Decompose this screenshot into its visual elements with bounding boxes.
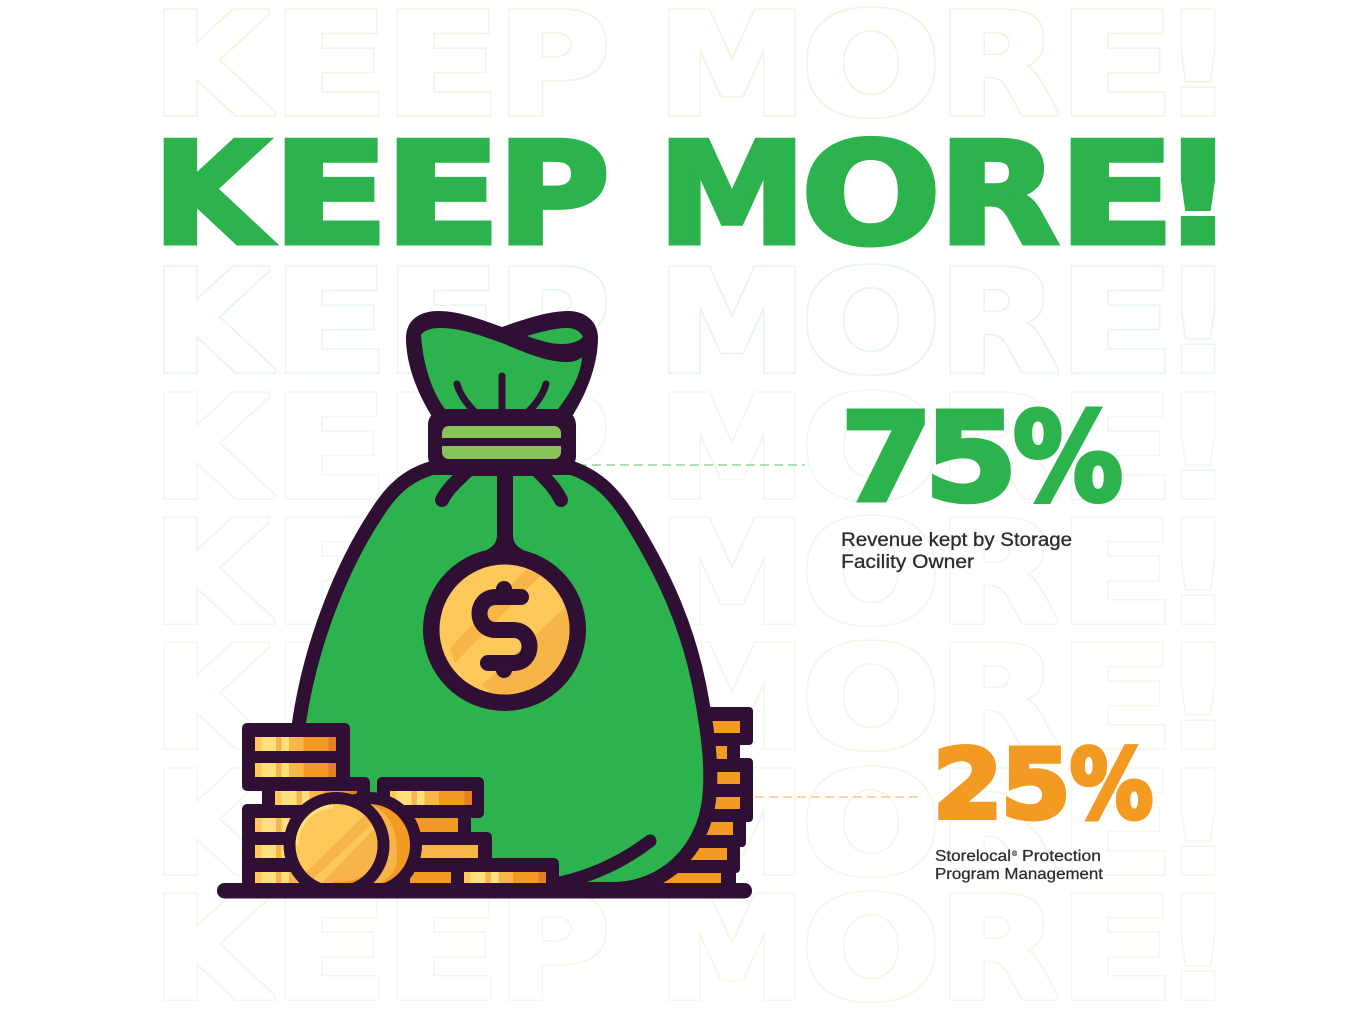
- dashed connector: 75%: [578, 464, 805, 466]
- background outlined text rows: P: [497, 241, 610, 405]
- background outlined text rows: E: [272, 743, 389, 907]
- title: M: [658, 113, 806, 277]
- 75% number: %: [1013, 387, 1123, 529]
- 25% number: 2: [933, 730, 1002, 840]
- background outlined text rows: K: [153, 492, 274, 656]
- dashed connector: 25%: [755, 796, 920, 798]
- icon: money bag with coin stacks: [217, 311, 753, 898]
- background outlined text rows: P: [497, 743, 610, 907]
- bag strings: [474, 474, 535, 555]
- title: R: [938, 113, 1059, 277]
- 25% caption: Protection: [1022, 848, 1101, 865]
- background outlined text rows: E: [384, 743, 501, 907]
- background outlined text rows: !: [1161, 617, 1235, 781]
- bag top knot: [406, 311, 598, 418]
- title: P: [497, 113, 610, 277]
- background outlined text rows: !: [1161, 743, 1235, 907]
- bag tie band: [428, 410, 576, 476]
- background outlined text rows: E: [1058, 617, 1175, 781]
- background outlined text rows: R: [938, 743, 1059, 907]
- background outlined text rows: E: [1058, 367, 1175, 531]
- background outlined text rows: M: [658, 241, 806, 405]
- background outlined text rows: E: [384, 617, 501, 781]
- 75% caption: Revenue kept by Storage: [841, 530, 1072, 551]
- background outlined text rows: E: [384, 241, 501, 405]
- background outlined text rows: M: [658, 367, 806, 531]
- background outlined text rows: O: [801, 241, 941, 405]
- bag body: [298, 468, 710, 889]
- background outlined text rows: !: [1161, 241, 1235, 405]
- 25% caption: Program Management: [935, 866, 1104, 883]
- background outlined text rows: P: [497, 367, 610, 531]
- 25% caption: Storelocal: [935, 848, 1011, 865]
- background outlined text rows: E: [1058, 492, 1175, 656]
- background outlined text rows: E: [384, 492, 501, 656]
- icon: dollar coin: [423, 550, 586, 711]
- background outlined text rows: O: [801, 367, 941, 531]
- bag crease: [560, 841, 650, 883]
- background outlined text rows: P: [497, 492, 610, 656]
- background outlined text rows: E: [272, 617, 389, 781]
- 75% caption: Facility Owner: [841, 552, 975, 573]
- 25% number: %: [1070, 730, 1153, 840]
- background outlined text rows: E: [1058, 743, 1175, 907]
- background outlined text rows: R: [938, 241, 1059, 405]
- background outlined text rows: E: [272, 367, 389, 531]
- title: O: [801, 113, 941, 277]
- 75% number: 5: [924, 387, 1018, 529]
- 25% caption: ®: [1012, 850, 1018, 858]
- background outlined text rows: !: [1161, 492, 1235, 656]
- front coin: [284, 792, 390, 883]
- stat: 75%: [841, 387, 1123, 573]
- background outlined text rows: M: [658, 743, 806, 907]
- 75% number: 7: [841, 387, 933, 529]
- stat: 25%: [933, 730, 1153, 883]
- background outlined text rows: P: [497, 617, 610, 781]
- background outlined text rows: E: [384, 367, 501, 531]
- background outlined text rows: K: [153, 241, 274, 405]
- title: E: [1058, 113, 1175, 277]
- title: E: [384, 113, 501, 277]
- title: !: [1161, 113, 1235, 277]
- background outlined text rows: O: [801, 492, 941, 656]
- title: E: [272, 113, 389, 277]
- background outlined text rows: M: [658, 492, 806, 656]
- background outlined text rows: E: [1058, 241, 1175, 405]
- 25% number: 5: [1001, 730, 1070, 840]
- background outlined text rows: !: [1161, 367, 1235, 531]
- background outlined text rows: R: [938, 367, 1059, 531]
- background outlined text rows: K: [153, 367, 274, 531]
- background outlined text rows: [153, 0, 1235, 1011]
- title: K: [153, 113, 274, 277]
- background outlined text rows: K: [153, 617, 274, 781]
- left coin stacks: [242, 723, 559, 890]
- background outlined text rows: O: [801, 617, 941, 781]
- background outlined text rows: O: [801, 743, 941, 907]
- right coin stack: [640, 707, 753, 890]
- background outlined text rows: R: [938, 492, 1059, 656]
- background outlined text rows: E: [272, 241, 389, 405]
- background outlined text rows: M: [658, 617, 806, 781]
- background outlined text rows: E: [272, 492, 389, 656]
- ground line: [217, 883, 752, 898]
- back coin: [316, 792, 422, 898]
- background outlined text rows: K: [153, 743, 274, 907]
- background outlined text rows: R: [938, 617, 1059, 781]
